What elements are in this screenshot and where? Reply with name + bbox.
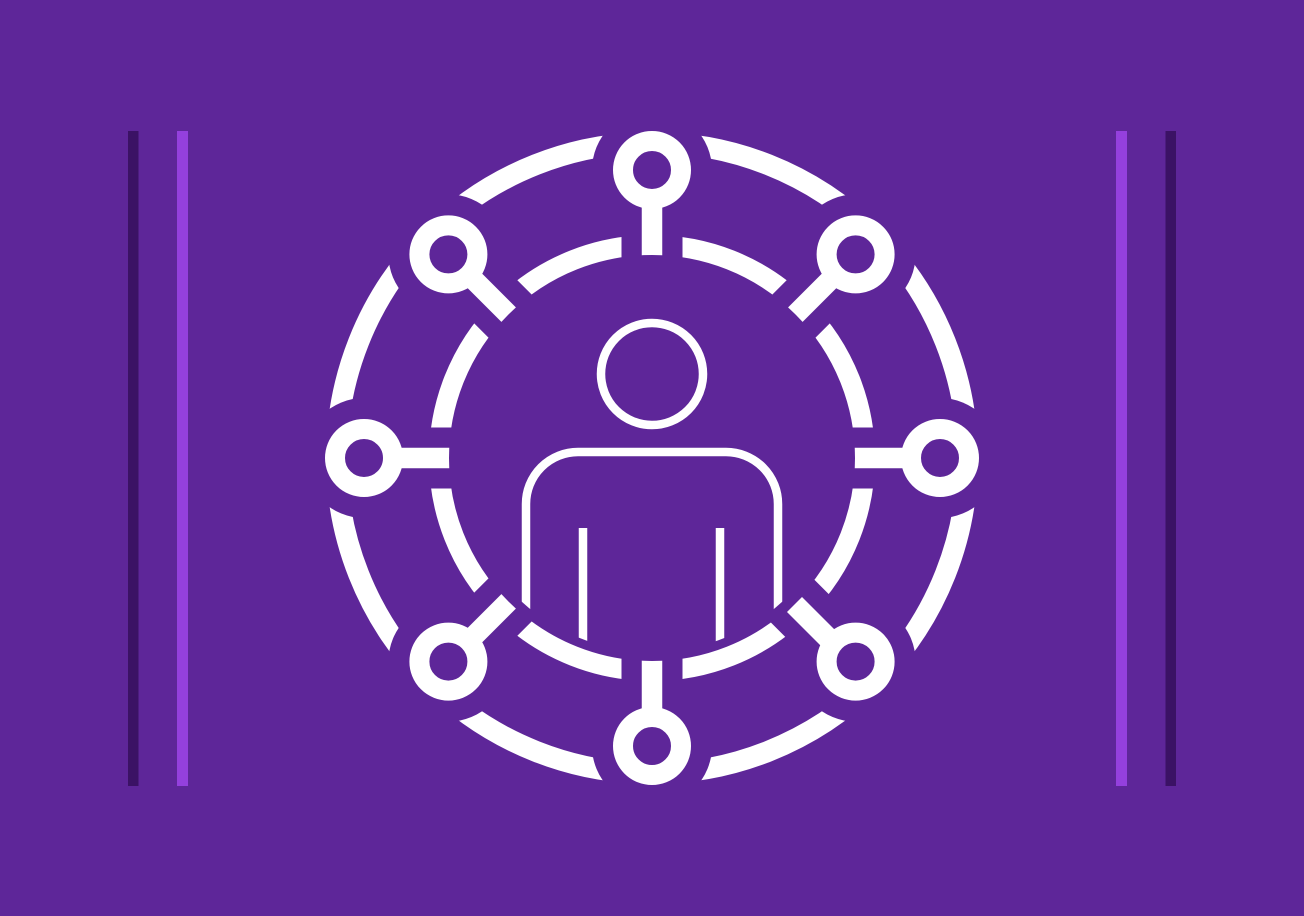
node: top (623, 141, 681, 199)
node: left (335, 429, 393, 487)
left decorative bars (128, 131, 188, 786)
node: bottom (623, 717, 681, 775)
icon: person (526, 323, 778, 660)
network illustration (128, 131, 1176, 786)
node: top right (827, 225, 885, 283)
inner segmented ring (439, 245, 865, 671)
outer segmented ring (336, 142, 968, 774)
node: top left (419, 225, 477, 283)
node: bottom right (827, 633, 885, 691)
node: right (911, 429, 969, 487)
right decorative bars (1116, 131, 1176, 786)
person head (601, 323, 703, 425)
node: bottom left (419, 633, 477, 691)
connector spokes (394, 200, 910, 716)
network nodes (335, 141, 969, 775)
person body (526, 452, 778, 660)
